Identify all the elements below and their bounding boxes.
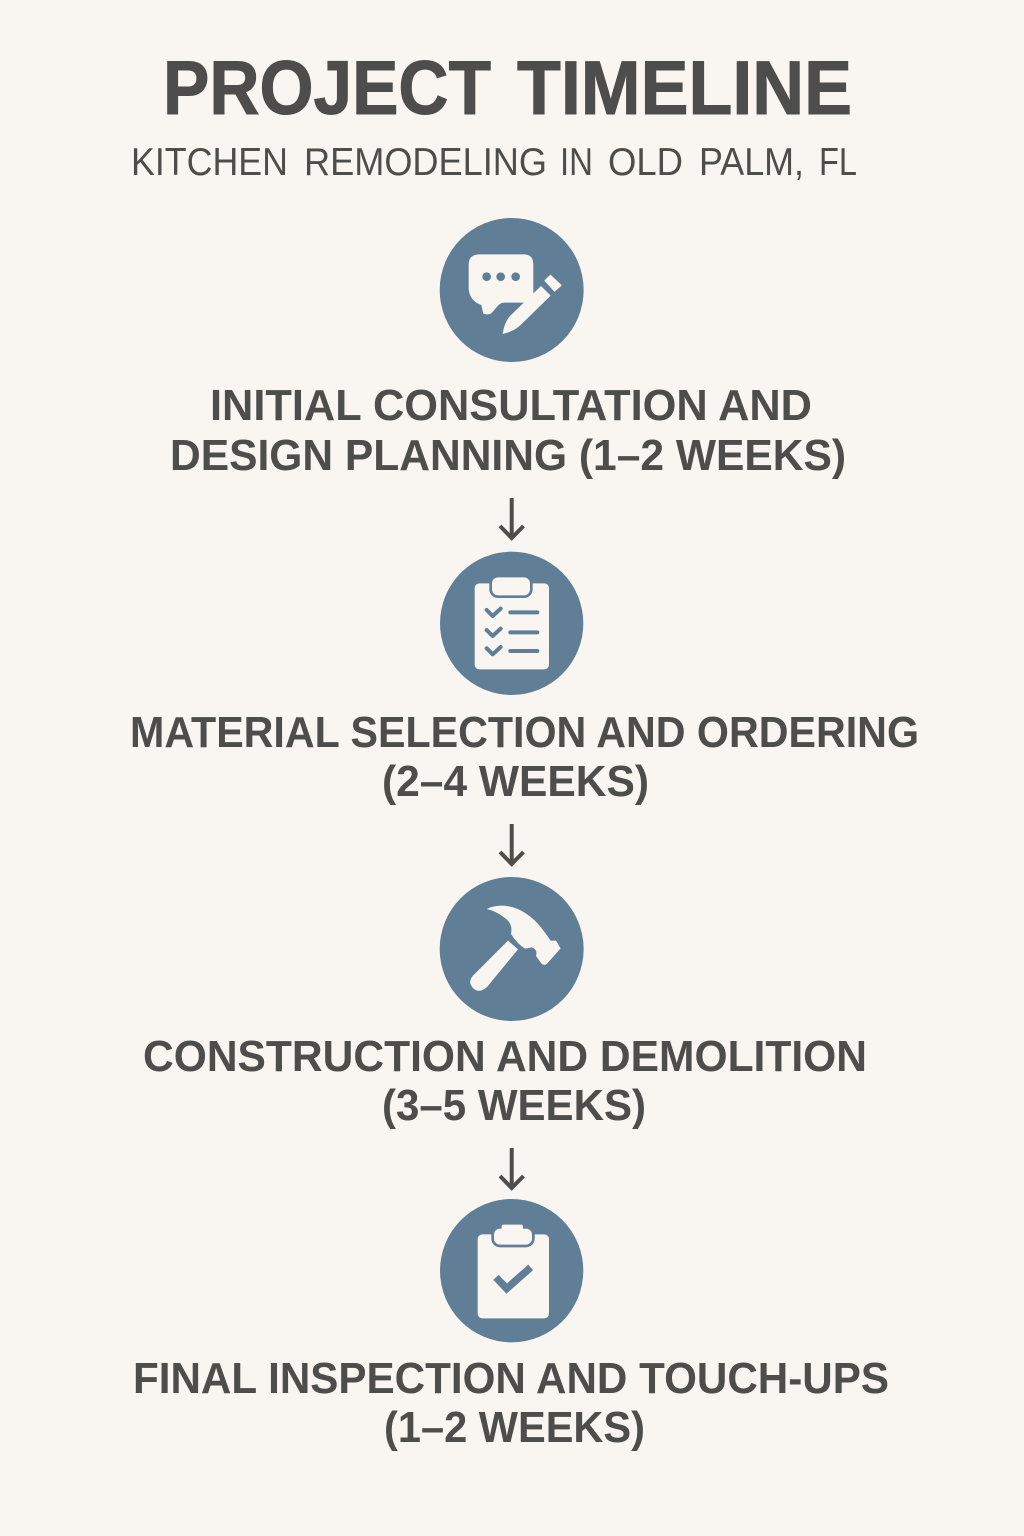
icon: clipboard check bbox=[440, 1199, 583, 1342]
step 1 heading: DESIGN PLANNING (1–2 WEEKS) bbox=[170, 432, 846, 480]
subtitle: PALM, bbox=[699, 141, 804, 184]
icon: hammer bbox=[440, 877, 584, 1021]
subtitle: REMODELING bbox=[304, 141, 547, 184]
arrow 2 bbox=[500, 824, 524, 864]
step 2 heading: (2–4 WEEKS) bbox=[382, 758, 649, 806]
arrow 3 bbox=[500, 1148, 524, 1188]
step 4 heading bbox=[133, 1355, 889, 1452]
step 3 heading: (3–5 WEEKS) bbox=[382, 1082, 646, 1130]
arrow 1 bbox=[500, 498, 524, 538]
subtitle: KITCHEN bbox=[131, 141, 288, 184]
subtitle: IN bbox=[560, 141, 593, 184]
step 3 heading: CONSTRUCTION AND DEMOLITION bbox=[143, 1033, 867, 1081]
step 3 heading bbox=[143, 1033, 867, 1130]
step 4 heading: FINAL INSPECTION AND TOUCH-UPS bbox=[133, 1355, 889, 1403]
subtitle: FL bbox=[819, 141, 857, 184]
step 1 heading bbox=[170, 382, 846, 480]
icon: clipboard checklist bbox=[440, 552, 583, 695]
subtitle: OLD bbox=[608, 141, 683, 184]
step 2 heading bbox=[130, 709, 919, 806]
subtitle bbox=[131, 141, 857, 184]
step 2 heading: MATERIAL SELECTION AND ORDERING bbox=[130, 709, 919, 757]
title: PROJECT bbox=[163, 46, 491, 131]
title bbox=[163, 46, 852, 131]
icon: speech bubble and pencil bbox=[440, 218, 584, 362]
step 1 heading: INITIAL CONSULTATION AND bbox=[210, 382, 812, 430]
step 4 heading: (1–2 WEEKS) bbox=[384, 1404, 645, 1452]
title: TIMELINE bbox=[517, 46, 852, 131]
